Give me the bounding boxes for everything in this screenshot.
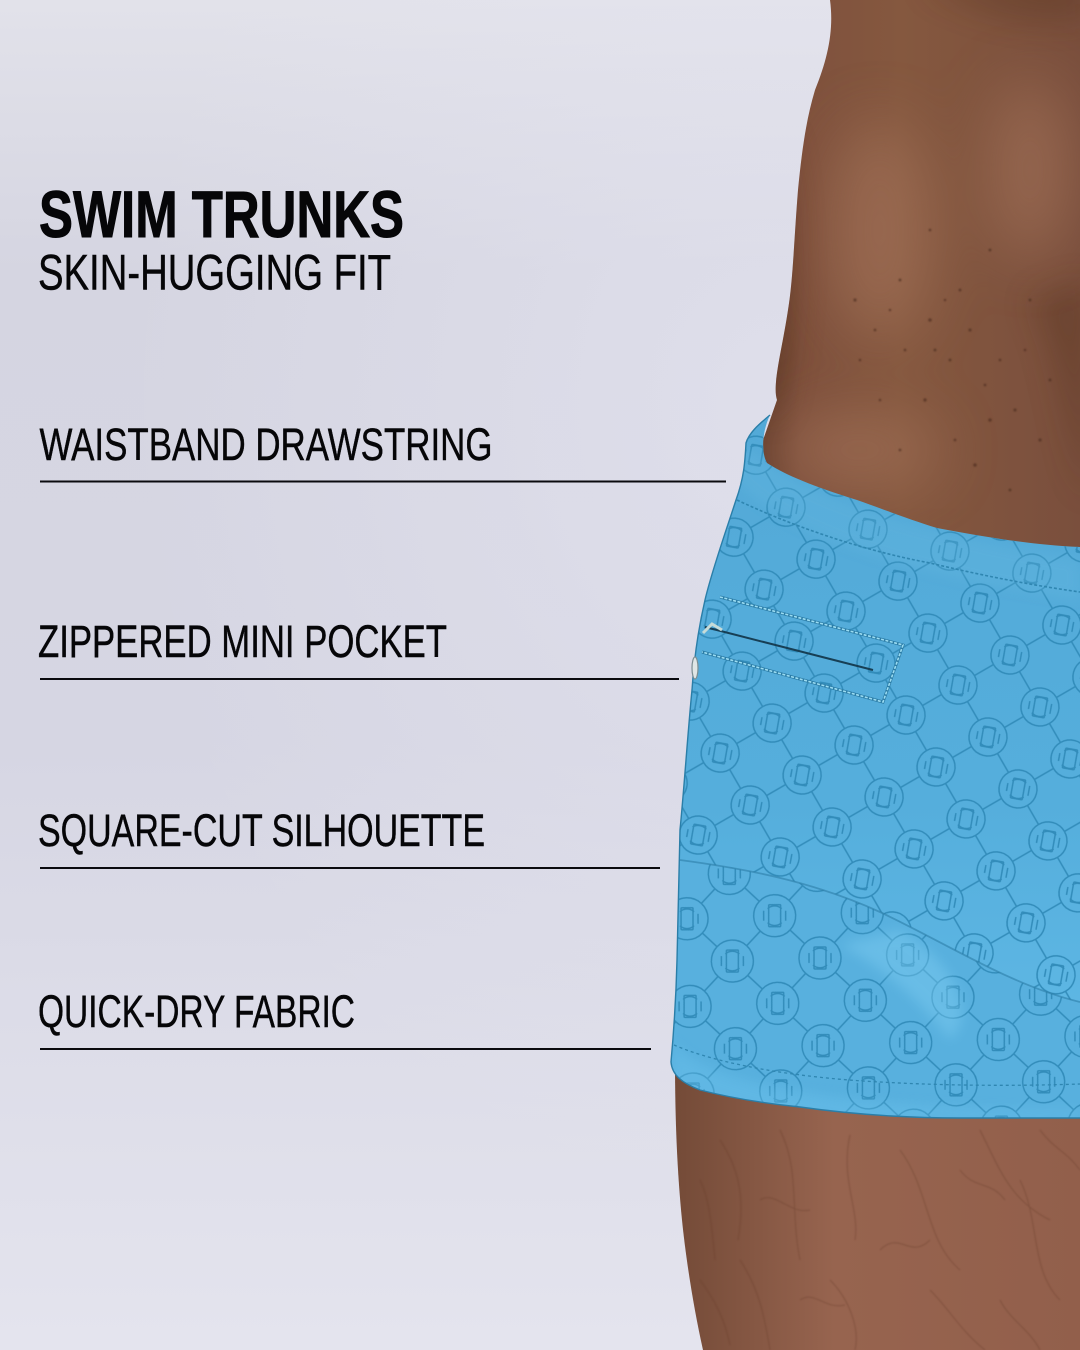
thigh (670, 1060, 1080, 1350)
monogram lattice print: upper (680, 436, 1080, 1000)
torso (763, 0, 1080, 547)
torso shading (775, 0, 1080, 410)
seam (680, 860, 1080, 1002)
waistband stitching (737, 500, 1080, 592)
lower panel base (676, 865, 1080, 1117)
thigh hair (782, 1130, 1079, 1350)
swim trunks (660, 400, 1080, 1130)
torso hair flecks (853, 229, 1052, 492)
monogram lattice print: lower (660, 860, 1080, 1130)
zipper pull (692, 657, 698, 679)
subtitle: SKIN-HUGGING FIT (38, 244, 391, 300)
fabric shading (670, 445, 1080, 1120)
torso highlights (780, 80, 1070, 486)
zippered pocket (692, 597, 903, 702)
trunks outline (671, 415, 1080, 1118)
feature callout: square-cut silhouette: SQUARE-CUT SILHOUETTE (38, 805, 485, 856)
feature callout: zippered mini pocket: ZIPPERED MINI POCKET (38, 616, 447, 667)
feature callout: quick-dry fabric: QUICK-DRY FABRIC (38, 986, 355, 1037)
title: SWIM TRUNKS (39, 177, 404, 251)
hem stitching (674, 1045, 1080, 1085)
title (38, 177, 404, 300)
feature callout: waistband drawstring: WAISTBAND DRAWSTRING (40, 419, 492, 470)
